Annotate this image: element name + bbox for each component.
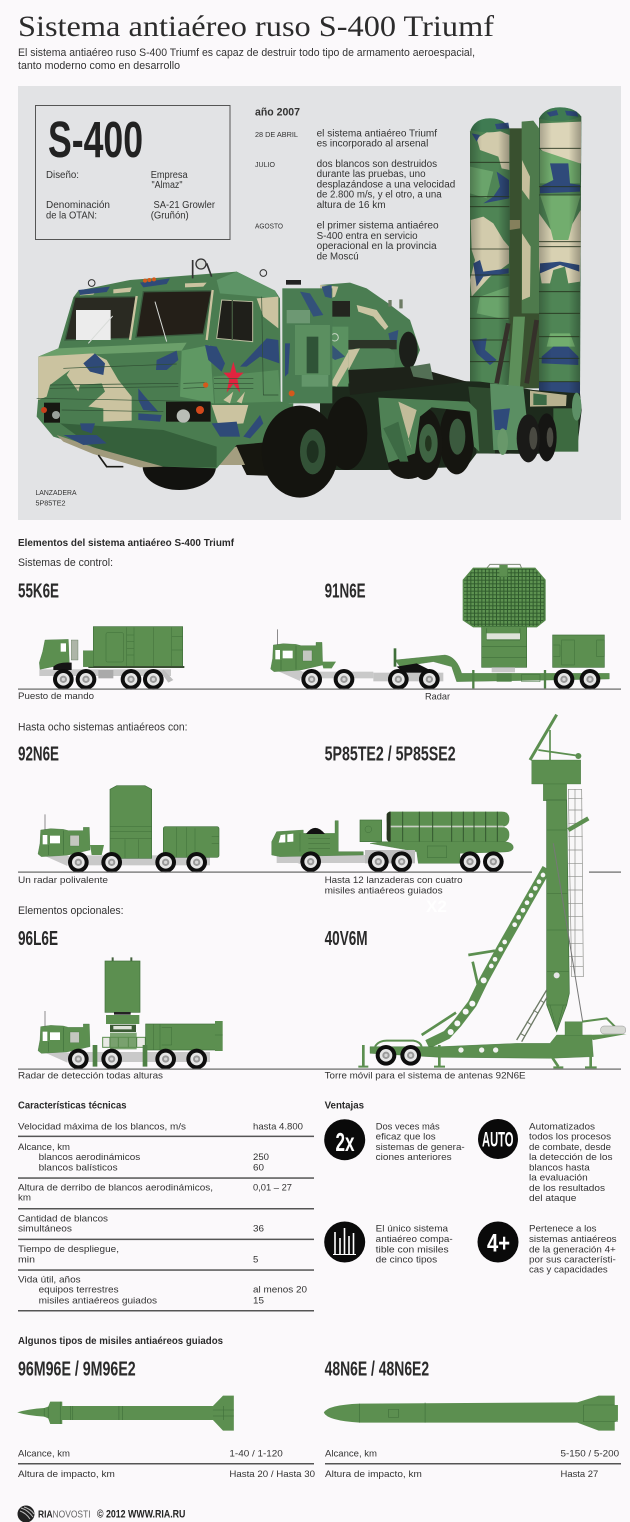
headlight housings <box>41 382 295 423</box>
caption: launchers: Hasta 12 lanzaderas con cuatro <box>325 875 463 886</box>
roof lights and mirror <box>88 259 267 467</box>
table: technical characteristics: hasta 4.800 <box>253 1121 303 1132</box>
caption: mobile tower: Torre móvil para el sistema de antenas 92N6E <box>325 1071 526 1082</box>
subtitle: El sistema antiaéreo ruso S-400 Triumf es capaz de destruir todo tipo de armamento aeroespacial, <box>18 47 475 59</box>
model: 96M96E: 96M96E / 9M96E2 <box>18 1359 136 1381</box>
trailer bed <box>358 1018 627 1067</box>
launcher base <box>370 842 513 863</box>
icon: missile bars <box>324 1222 365 1262</box>
table: technical characteristics: al menos 20 <box>253 1285 307 1296</box>
rear chassis <box>320 377 582 470</box>
timeline 2007: operacional en la provincia <box>317 241 437 252</box>
caption: multi radar: Un radar polivalente <box>18 875 108 886</box>
advantage text: generation 4+: de la generación 4+ <box>529 1244 616 1255</box>
caption: launchers <box>325 875 463 897</box>
sand camouflage <box>38 283 278 425</box>
rear wheels <box>326 397 557 480</box>
advantage text: twice as effective: ciones anteriores <box>376 1152 452 1163</box>
spec box: S-400 <box>48 111 143 168</box>
timeline 2007: JULIO <box>255 160 275 169</box>
stats: 48N6E: Alcance, km <box>325 1449 377 1460</box>
table: technical characteristics: Altura de derribo de blancos aerodinámicos, <box>18 1183 213 1194</box>
table: technical characteristics: 5 <box>253 1254 258 1265</box>
advantage text: five types: de cinco tipos <box>376 1254 437 1265</box>
stats: 48N6E: 5-150 / 5-200 <box>560 1449 619 1460</box>
timeline 2007: durante las pruebas, uno <box>317 169 426 180</box>
spec box <box>36 106 230 240</box>
table: technical characteristics: blancos aerodinámicos <box>39 1152 140 1163</box>
table: technical characteristics: Tiempo de despliegue, <box>18 1244 119 1255</box>
model: 92N6E: 92N6E <box>18 744 59 766</box>
advantage text: five types: tible con misiles <box>376 1244 449 1255</box>
stats: 96M96E: Altura de impacto, km <box>18 1469 115 1480</box>
table: technical characteristics: Cantidad de blancos <box>18 1213 108 1224</box>
icon: 2x <box>324 1119 365 1160</box>
table: technical characteristics: Vida útil, años <box>18 1275 81 1286</box>
timeline 2007: 28 DE ABRIL <box>255 130 298 139</box>
advantage text: automated: blancos hasta <box>529 1162 590 1173</box>
timeline 2007 <box>255 107 455 262</box>
timeline 2007: de 2.800 m/s, y el otro, a una <box>317 190 442 201</box>
table: technical characteristics: 15 <box>253 1295 264 1306</box>
icon: 2x: 2x <box>336 1127 355 1157</box>
tractor <box>271 629 323 681</box>
spec box: (Gruñón) <box>151 210 189 222</box>
timeline 2007: dos blancos son destruidos <box>317 159 437 170</box>
subtitle: tanto moderno como en desarrollo <box>18 60 180 72</box>
timeline 2007: desplazándose a una velocidad <box>317 180 455 190</box>
advantage text: automated: de combate, desde <box>529 1142 611 1153</box>
vehicle: 40V6M mobile tower <box>358 715 627 1067</box>
timeline 2007: el primer sistema antiaéreo <box>317 220 439 232</box>
navy camouflage <box>63 278 290 445</box>
rear cab block <box>282 280 332 403</box>
model: 55K6E: 55K6E <box>18 580 59 602</box>
panel caption <box>36 488 76 508</box>
advantage text: automated: la evaluación <box>529 1173 588 1184</box>
caption: all-altitude radar: Radar de detección todas alturas <box>18 1071 163 1082</box>
table: technical characteristics: blancos balísticos <box>39 1162 118 1173</box>
mast <box>547 800 588 1032</box>
caption: launchers: misiles antiaéreos guiados <box>325 886 443 897</box>
table: technical characteristics: Alcance, km <box>18 1142 70 1153</box>
stats: 48N6E <box>325 1449 621 1480</box>
advantage text: generation 4+: Pertenece a los <box>529 1224 597 1235</box>
caption: radar: Radar <box>425 692 450 702</box>
advantage text: automated <box>529 1121 613 1204</box>
ground line 2 <box>18 872 621 873</box>
missile rack <box>387 812 509 842</box>
spec box: Diseño: <box>46 170 79 181</box>
stats: 96M96E <box>18 1449 315 1480</box>
timeline 2007: año 2007 <box>255 107 300 119</box>
spec box: "Almaz" <box>152 180 183 191</box>
stay cables and ladder <box>517 843 583 1042</box>
windscreens <box>65 290 253 343</box>
advantage text: twice as effective <box>376 1121 465 1163</box>
model: 91N6E: 91N6E <box>325 580 366 602</box>
heading: elements: Elementos del sistema antiaéreo S-400 Triumf <box>18 537 234 549</box>
footer logo: © 2012 WWW.RIA.RU <box>97 1508 185 1520</box>
vehicle: 91N6E radar <box>271 564 609 690</box>
spec box: SA-21 Growler <box>154 200 216 211</box>
advantage text: generation 4+ <box>529 1224 617 1276</box>
stats: 96M96E: Alcance, km <box>18 1449 70 1460</box>
model: 48N6E: 48N6E / 48N6E2 <box>325 1359 429 1381</box>
advantage text: generation 4+: sistemas antiaéreos <box>529 1234 617 1245</box>
advantage text: twice as effective: sistemas de genera- <box>376 1142 465 1153</box>
missile: 96M96E <box>17 1396 234 1431</box>
hydraulic struts <box>497 317 537 387</box>
right tube <box>539 107 581 395</box>
timeline 2007: de Moscú <box>317 251 359 262</box>
advantage text: five types: antiaéreo compa- <box>376 1234 453 1245</box>
stats: 48N6E: Altura de impacto, km <box>325 1469 422 1480</box>
vehicle: 5P85 launcher <box>272 812 513 872</box>
table: technical characteristics: equipos terrestres <box>39 1285 119 1296</box>
roof and hood lighter areas <box>38 272 281 403</box>
footer logo: RIANOVOSTI <box>38 1508 91 1520</box>
fender with camo <box>378 398 479 463</box>
timeline 2007: es incorporado al arsenal <box>317 139 428 150</box>
caption: command post: Puesto de mando <box>18 691 94 702</box>
heading: missiles: Algunos tipos de misiles antiaéreos guiados <box>18 1335 223 1347</box>
cab body <box>37 272 293 468</box>
table: technical characteristics: misiles antiaéreos guiados <box>39 1295 157 1306</box>
timeline 2007: el sistema antiaéreo Triumf <box>317 128 437 140</box>
front wheel under cab <box>143 443 216 490</box>
stats: 48N6E: Hasta 27 <box>560 1469 598 1480</box>
subheading: eight systems: Hasta ocho sistemas antiaéreos con: <box>18 722 188 734</box>
icon: 4+: 4+ <box>487 1230 510 1258</box>
footer logo <box>18 1506 185 1522</box>
advantage text: twice as effective: Dos veces más <box>376 1121 440 1132</box>
title: Sistema antiaéreo ruso S-400 Triumf <box>18 10 494 43</box>
table: technical characteristics: 60 <box>253 1162 264 1173</box>
boom arm <box>422 868 547 1044</box>
spec box: de la OTAN: <box>46 210 97 222</box>
tractor <box>277 855 365 863</box>
grille lines <box>37 297 278 412</box>
stats: 96M96E: Hasta 20 / Hasta 30 <box>229 1469 315 1480</box>
red star <box>223 362 244 393</box>
model: 5P85: 5P85TE2 / 5P85SE2 <box>325 744 456 766</box>
ground line 1 <box>18 688 621 690</box>
table: technical characteristics: km <box>18 1193 31 1204</box>
table: technical characteristics: simultáneos <box>18 1224 72 1235</box>
antenna head <box>530 715 581 801</box>
radar antenna <box>463 564 545 627</box>
advantage text: generation 4+: por sus característi- <box>529 1255 616 1266</box>
icon: AUTO: AUTO <box>482 1129 514 1152</box>
advantage text: automated: Automatizados <box>529 1121 595 1132</box>
missile: 48N6E <box>324 1396 618 1431</box>
table: technical characteristics: 0,01 – 27 <box>253 1183 292 1194</box>
stats: 96M96E: 1-40 / 1-120 <box>229 1449 283 1460</box>
advantage text: automated: de los resultados <box>529 1183 605 1194</box>
panel caption: 5P85TE2 <box>36 498 66 508</box>
trailer gooseneck <box>395 655 609 682</box>
advantage text: five types <box>376 1224 453 1265</box>
dark lower bumper <box>60 423 217 467</box>
heading: advantages: Ventajas <box>325 1099 364 1111</box>
launcher rear: missile tubes and chassis <box>320 107 582 480</box>
lattice antenna panel <box>568 789 583 977</box>
launcher cab <box>37 259 338 498</box>
advantage text: automated: del ataque <box>529 1193 576 1204</box>
timeline 2007: altura de 16 km <box>317 200 386 211</box>
timeline 2007: S-400 entra en servicio <box>317 231 418 242</box>
vehicle: 55K6E command post <box>39 627 184 690</box>
advantage text: automated: todos los procesos <box>529 1132 611 1143</box>
center tube <box>508 121 540 388</box>
advantage text: five types: El único sistema <box>376 1224 449 1235</box>
table: technical characteristics: min <box>18 1254 35 1265</box>
ground line 3 <box>18 1068 621 1070</box>
rear equipment box <box>553 635 604 667</box>
model: 40V6M: 40V6M <box>325 928 368 950</box>
panel caption: LANZADERA <box>36 488 76 497</box>
subtitle <box>18 47 475 72</box>
undercarriage <box>218 440 297 477</box>
advantage text: automated: la detección de los <box>529 1152 613 1163</box>
icon: AUTO <box>478 1119 518 1159</box>
table: technical characteristics: Velocidad máxima de los blancos, m/s <box>18 1121 186 1132</box>
advantage text: generation 4+: cas y capacidades <box>529 1265 608 1276</box>
model: 96L6E: 96L6E <box>18 928 58 950</box>
radar mount <box>482 627 527 672</box>
icon: 4+ <box>478 1222 518 1262</box>
heading: technical characteristics: Características técnicas <box>18 1099 127 1111</box>
subheading: control systems: Sistemas de control: <box>18 557 113 569</box>
front main wheel <box>262 406 338 498</box>
mid superstructure <box>320 283 467 395</box>
spec box: Denominación <box>46 200 110 211</box>
left tube <box>470 118 510 385</box>
watermark: X2 <box>426 897 447 916</box>
vehicle: 92N6E radar <box>38 786 219 873</box>
table: technical characteristics: 250 <box>253 1152 269 1163</box>
timeline 2007: AGOSTO <box>255 222 283 230</box>
advantage text: twice as effective: eficaz que los <box>376 1132 436 1143</box>
table: technical characteristics: 36 <box>253 1224 264 1235</box>
vehicle: 96L6E radar <box>38 957 223 1069</box>
spec box: Empresa <box>151 170 188 181</box>
table: technical characteristics <box>18 1121 314 1312</box>
subheading: optional elements: Elementos opcionales: <box>18 905 124 917</box>
panel: S-400 launcher <box>18 86 621 520</box>
